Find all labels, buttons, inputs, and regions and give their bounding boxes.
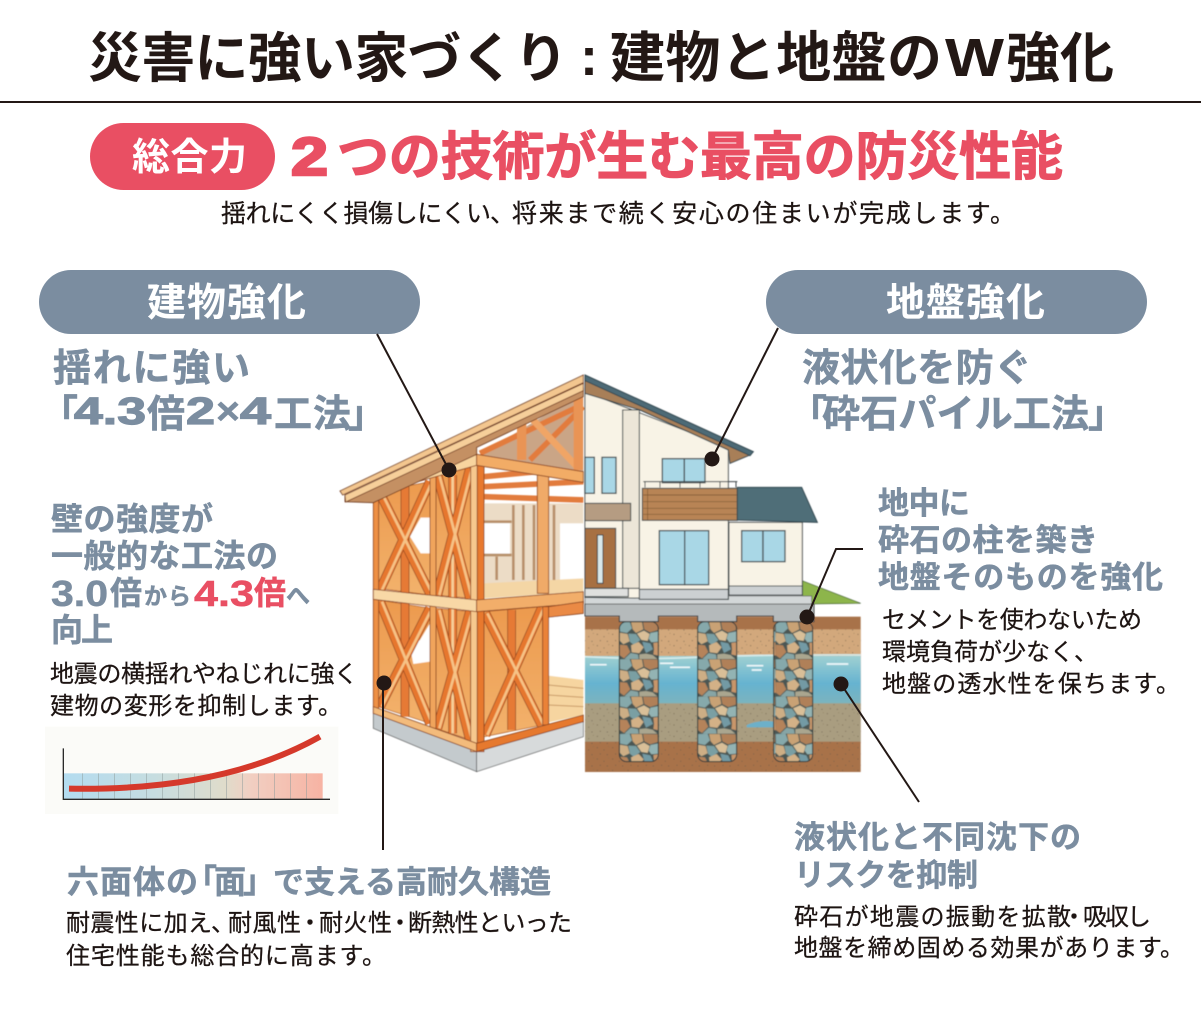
text block: 耐震性: 断熱性といった bbox=[408, 910, 572, 937]
heading: 4.3倍2×4工法: 4.3 bbox=[74, 391, 146, 433]
heading: 砕石パイル工法: 「 bbox=[789, 394, 827, 436]
heading: 4.3倍2×4工法: 工法 bbox=[274, 394, 351, 436]
heading: 4.3倍2×4工法: 4 bbox=[240, 391, 271, 433]
subtitle: 将来まで続く安心の住まいが完成します。 bbox=[512, 200, 1015, 228]
text block: 耐震性: ・ bbox=[298, 910, 322, 937]
heading: 液状化と不同沈下 bbox=[794, 820, 1081, 893]
text block: 耐震性 bbox=[66, 910, 572, 970]
heading: 砕石パイル工法 bbox=[789, 348, 1126, 436]
panel header: 地盤強化 bbox=[766, 270, 1147, 334]
title: : bbox=[580, 27, 598, 87]
braces bbox=[380, 468, 542, 740]
heading: 最高の防災性能: 2 bbox=[291, 127, 328, 187]
interior behind right side bbox=[477, 392, 583, 723]
subtitle bbox=[221, 200, 1015, 228]
text block: 壁の強度: 3.0 bbox=[51, 573, 108, 614]
heading: 4.3倍2×4工法: 揺れに強い bbox=[53, 348, 250, 390]
text block: 壁の強度: 倍 bbox=[254, 575, 286, 611]
text block: セメント: セメントを使わないため bbox=[882, 607, 1142, 634]
text block: 地中に砕石の柱 bbox=[878, 486, 1163, 595]
foundation slab bbox=[585, 604, 814, 622]
text block: 地震の横揺れ: 建物の変形を抑制します。 bbox=[50, 693, 342, 720]
text block: 耐震性: 耐風性 bbox=[228, 910, 301, 937]
text block: 耐震性: 耐火性 bbox=[319, 910, 392, 937]
panel header: 建物強化 bbox=[39, 270, 420, 334]
heading: 六面体: で支える高耐久構造 bbox=[273, 865, 551, 900]
panel header: 建物強化: 建物強化 bbox=[147, 282, 306, 325]
title: W bbox=[945, 28, 1004, 88]
text block: 壁の強度: へ bbox=[286, 583, 310, 610]
text block: 壁の強度: 壁の強度が bbox=[51, 501, 213, 537]
stone piles bbox=[619, 622, 813, 762]
text block: 砕石が地震: 吸収し bbox=[1083, 904, 1151, 931]
heading: 砕石パイル工法: 液状化を防ぐ bbox=[802, 348, 1032, 390]
soil layers bbox=[585, 617, 861, 772]
heading: 4.3倍2×4工法 bbox=[40, 348, 386, 436]
leader: frame wall bbox=[377, 334, 456, 478]
text block: 地震の横揺れ: 地震の横揺れやねじれに強く bbox=[50, 661, 358, 688]
text block: 耐震性: 住宅性能も総合的に高ます。 bbox=[66, 943, 386, 970]
text block: セメント: 地盤の透水性を保ちます。 bbox=[882, 671, 1180, 698]
text block: 砕石が地震: 砕石が地震の振動を拡散 bbox=[794, 904, 1071, 931]
text block: 壁の強度: 4.3 bbox=[194, 573, 254, 614]
house walls bbox=[585, 392, 802, 599]
illustration: house and crushed stone piles bbox=[585, 375, 861, 772]
text block: 砕石が地震 bbox=[794, 904, 1184, 962]
heading: 4.3倍2×4工法: 倍 bbox=[147, 394, 185, 436]
title: 災害に強い家づくり bbox=[88, 29, 568, 89]
text block: セメント: 環境負荷が少なく、 bbox=[882, 639, 1098, 666]
heading: 六面体: 」 bbox=[243, 863, 275, 899]
heading: 4.3倍2×4工法: × bbox=[216, 391, 240, 433]
text block: 耐震性: ・ bbox=[388, 910, 412, 937]
heading: 六面体: 六面体の bbox=[67, 864, 198, 900]
chart: strength curve bbox=[45, 727, 338, 814]
text block: 壁の強度 bbox=[51, 501, 310, 648]
text block: 耐震性: 耐震性に加え bbox=[66, 910, 212, 937]
leader: stone column bbox=[800, 549, 863, 624]
heading: 4.3倍2×4工法: 」 bbox=[348, 394, 386, 436]
subtitle: 、 bbox=[490, 200, 515, 228]
openings bbox=[410, 518, 430, 664]
leader: house bbox=[704, 328, 778, 466]
text block: セメント bbox=[882, 607, 1180, 698]
panel header: 地盤強化: 地盤強化 bbox=[886, 282, 1045, 325]
balcony bbox=[642, 482, 737, 520]
text block: 壁の強度: 向上 bbox=[51, 612, 113, 648]
badge: 総合力 bbox=[90, 123, 275, 190]
heading: 液状化と不同沈下: 液状化と不同沈下の bbox=[794, 820, 1081, 855]
text block: 地中に砕石の柱: 砕石の柱を築き bbox=[878, 523, 1098, 558]
roof bbox=[340, 375, 583, 503]
text block: 耐震性: 、 bbox=[211, 910, 235, 937]
roofs bbox=[585, 375, 817, 522]
text block: 壁の強度: から bbox=[144, 583, 191, 609]
text block: 壁の強度: 一般的な工法の bbox=[51, 538, 278, 574]
title bbox=[88, 27, 1114, 89]
heading: 4.3倍2×4工法: 「 bbox=[40, 394, 78, 436]
badge: 総合力: 総合力 bbox=[132, 137, 247, 179]
heading: 砕石パイル工法: 」 bbox=[1088, 394, 1126, 436]
text block: 地震の横揺れ bbox=[50, 661, 358, 720]
grass bbox=[803, 581, 861, 604]
heading: 4.3倍2×4工法: 2 bbox=[186, 391, 215, 433]
heading: 六面体 bbox=[67, 863, 551, 900]
subtitle: 揺れにくく損傷しにくい bbox=[221, 200, 491, 228]
posts and beams bbox=[373, 454, 583, 752]
heading: 六面体: 「 bbox=[185, 863, 217, 899]
wall panels bbox=[378, 467, 543, 740]
windows bbox=[585, 457, 785, 585]
heading: 砕石パイル工法: 砕石パイル工法 bbox=[822, 394, 1089, 436]
title: 建物と地盤の bbox=[610, 27, 942, 89]
heading: 六面体: 面 bbox=[214, 864, 246, 900]
text block: 壁の強度: 倍 bbox=[110, 575, 142, 611]
text block: 地中に砕石の柱: 地盤そのものを強化 bbox=[878, 560, 1163, 595]
text block: 砕石が地震: 地盤を締め固める効果があります。 bbox=[794, 935, 1184, 962]
text block: 砕石が地震: ・ bbox=[1062, 904, 1086, 931]
text block: 地中に砕石の柱: 地中に bbox=[878, 486, 970, 521]
heading: 最高の防災性能: つの技術が生む最高の防災性能 bbox=[337, 129, 1063, 187]
foundation bbox=[373, 713, 583, 772]
heading: 液状化と不同沈下: リスクを抑制 bbox=[794, 858, 978, 893]
leader: groundwater bbox=[834, 676, 919, 802]
leader: six-sided structure bbox=[376, 676, 392, 850]
title: 強化 bbox=[1006, 29, 1114, 89]
illustration: wooden 2x4 frame bbox=[340, 375, 583, 772]
